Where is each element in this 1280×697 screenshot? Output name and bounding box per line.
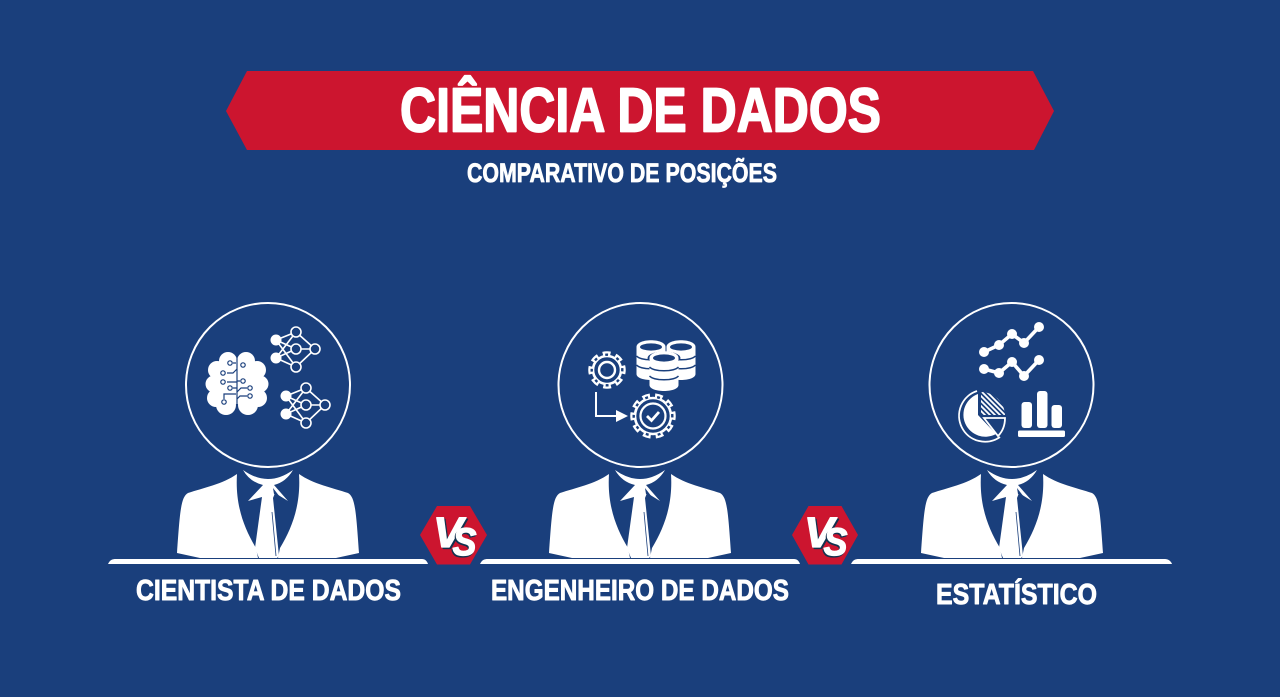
vs badge right: V bbox=[804, 509, 837, 557]
vs badge right bbox=[792, 506, 858, 566]
label: ESTATÍSTICO bbox=[936, 577, 1097, 611]
figure: suit bust bbox=[549, 470, 731, 558]
head circle bbox=[558, 303, 722, 467]
figure: suit bust bbox=[177, 470, 359, 558]
desk line bbox=[108, 559, 428, 564]
figure: suit bust bbox=[921, 470, 1103, 558]
vs badge left: S bbox=[452, 521, 476, 564]
desk line bbox=[851, 559, 1172, 564]
vs badge left: V bbox=[433, 509, 466, 557]
panel: engenheiro de dados bbox=[480, 303, 800, 607]
icon: pie chart bbox=[958, 390, 1006, 443]
desk line bbox=[480, 559, 800, 564]
head circle bbox=[186, 303, 350, 467]
panel: cientista de dados bbox=[108, 303, 428, 607]
label: ENGENHEIRO DE DADOS bbox=[491, 575, 789, 607]
vs badge left: S bbox=[452, 522, 476, 566]
icon: brain with circuits bbox=[206, 352, 268, 415]
vs badge right: S bbox=[824, 521, 848, 564]
vs badge left: V bbox=[434, 510, 468, 558]
icon: line chart bottom bbox=[979, 355, 1044, 381]
vs badge right: S bbox=[822, 522, 846, 566]
head circle bbox=[930, 303, 1094, 467]
icon: line chart top bbox=[979, 322, 1044, 357]
panel: estatistico bbox=[851, 303, 1172, 611]
title banner bbox=[226, 71, 1054, 150]
label: CIENTISTA DE DADOS bbox=[136, 575, 401, 607]
title: CIÊNCIA DE DADOS bbox=[400, 76, 881, 146]
vs badge left bbox=[420, 506, 487, 566]
icon: gear bbox=[592, 354, 622, 386]
subtitle: COMPARATIVO DE POSIÇÕES bbox=[467, 158, 777, 188]
icon: databases bbox=[636, 340, 696, 391]
vs badge right: V bbox=[806, 510, 839, 558]
arrow bbox=[596, 392, 628, 422]
icon: bar chart bbox=[1018, 391, 1065, 437]
icon: neural network top bbox=[270, 327, 320, 372]
icon: neural network bottom bbox=[280, 383, 330, 428]
icon: gear with check bbox=[634, 396, 672, 436]
